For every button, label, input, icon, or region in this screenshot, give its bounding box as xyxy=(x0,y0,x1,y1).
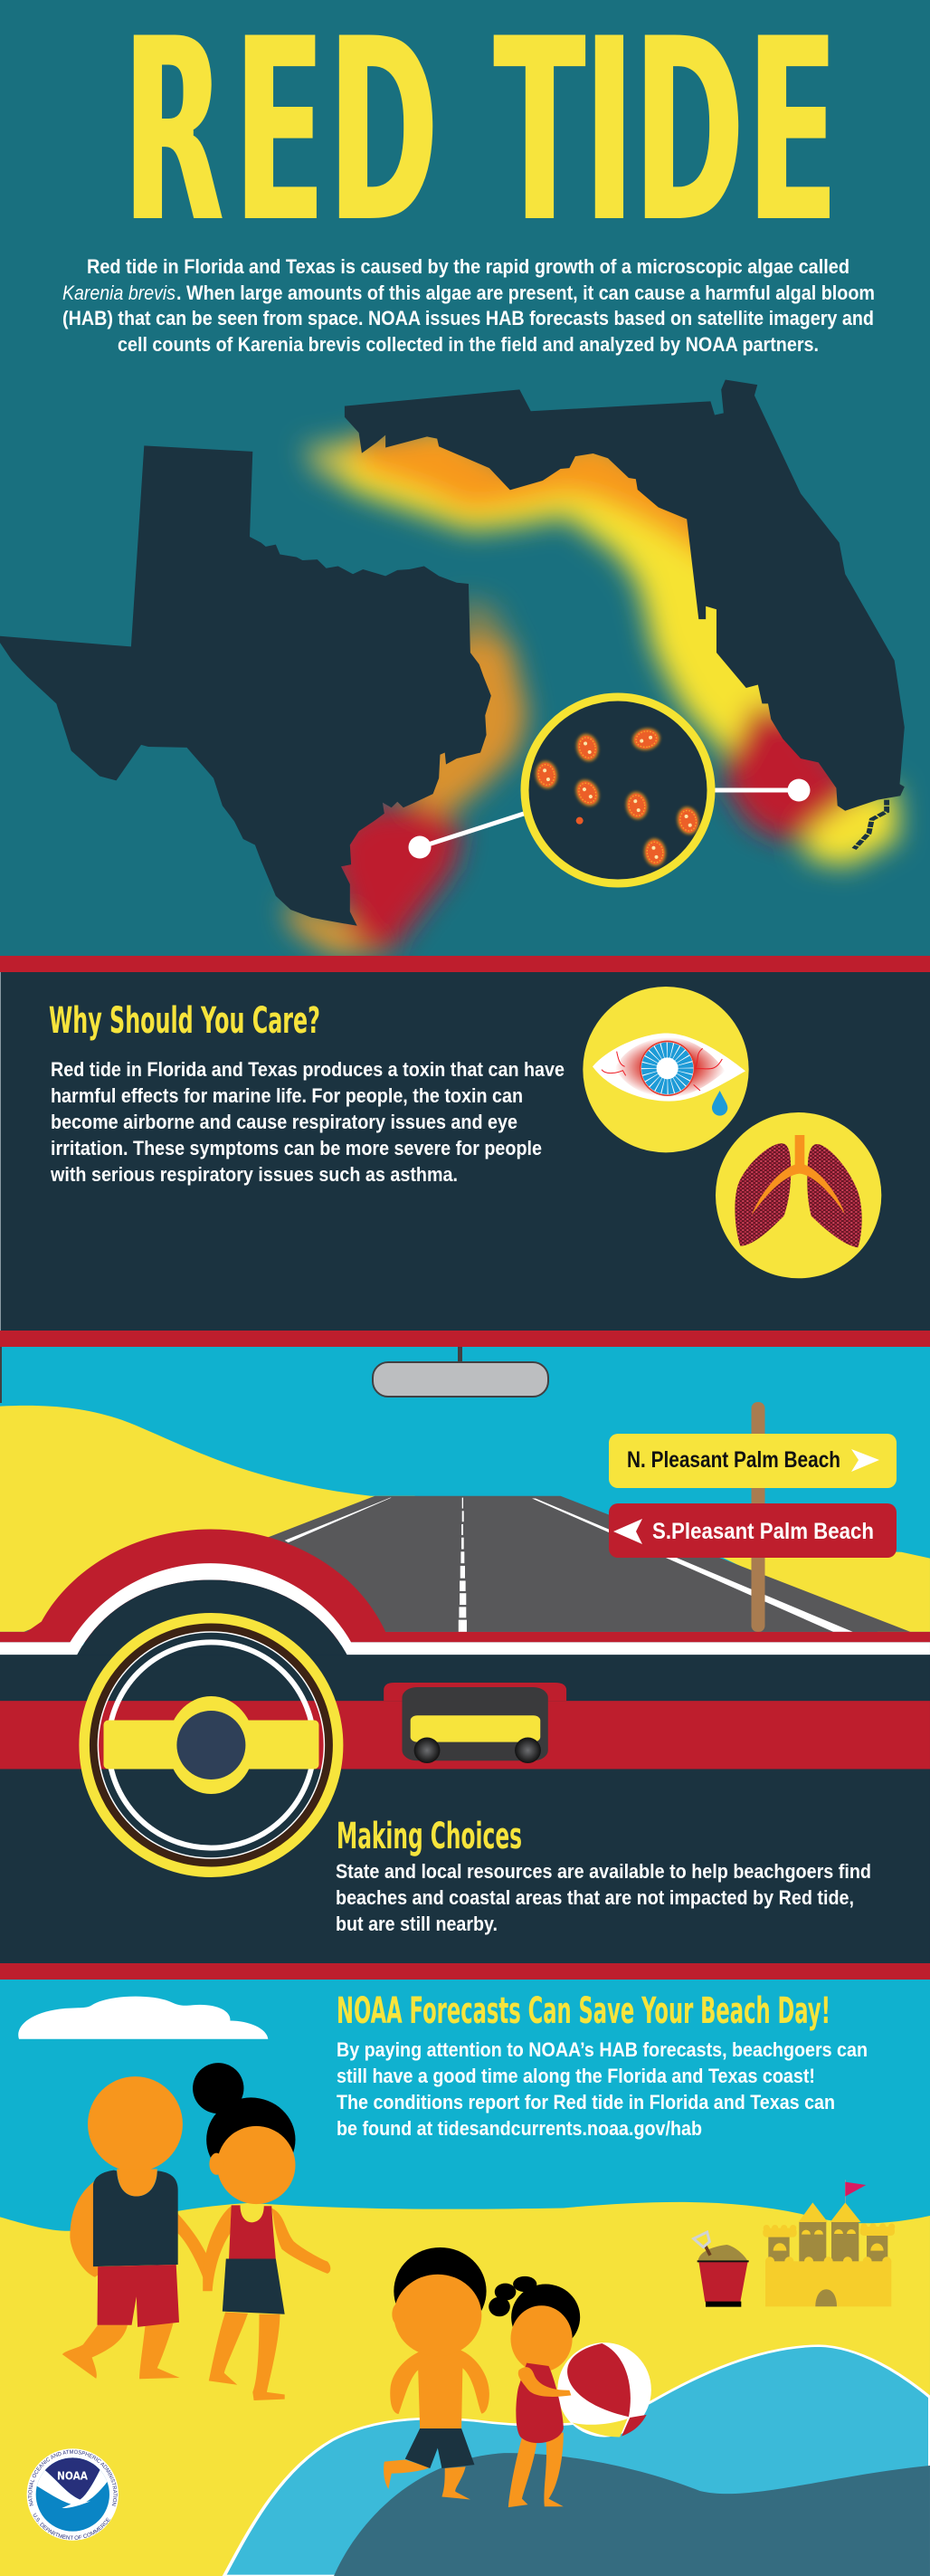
panel: why should you care xyxy=(0,956,930,1331)
panel: red tide header and map xyxy=(0,0,930,956)
algal bloom glow along the coast xyxy=(285,425,898,955)
road and sand landscape xyxy=(0,1406,930,1632)
heading: Making Choices xyxy=(337,1816,522,1857)
body text xyxy=(336,1860,871,1935)
beach ball xyxy=(557,2342,651,2437)
intro text: cell counts of Karenia brevis collected in the field and analyzed by NOAA partners. xyxy=(118,333,819,356)
body text: but are still nearby. xyxy=(336,1913,498,1935)
icon: irritated eye xyxy=(583,987,749,1152)
body text: become airborne and cause respiratory issues and eye xyxy=(51,1111,517,1133)
intro text xyxy=(62,255,875,356)
panel: making choices driving scene xyxy=(0,1331,930,1970)
NOAA logo: NATIONAL OCEANIC AND ATMOSPHERIC ADMINISTRATION xyxy=(28,2449,118,2506)
body text: with serious respiratory issues such as asthma. xyxy=(50,1163,458,1186)
NOAA logo: NOAA xyxy=(57,2469,89,2482)
steering wheel xyxy=(84,1618,337,1872)
body text xyxy=(337,2038,868,2140)
body text: Red tide in Florida and Texas produces a toxin that can have xyxy=(51,1058,565,1081)
car radio display xyxy=(402,1687,548,1763)
road signs xyxy=(609,1402,897,1632)
body text: The conditions report for Red tide in Florida and Texas can xyxy=(337,2091,835,2113)
body text: irritation. These symptoms can be more severe for people xyxy=(51,1137,542,1159)
boy figure xyxy=(384,2247,489,2499)
dashboard xyxy=(0,1529,930,1970)
road signs: N. Pleasant Palm Beach xyxy=(627,1447,840,1473)
map: Florida xyxy=(345,380,905,849)
body text: harmful effects for marine life. For people, the toxin can xyxy=(51,1084,523,1107)
rear-view mirror xyxy=(373,1347,548,1397)
intro text: Red tide in Florida and Texas is caused by the rapid growth of a microscopic algae called xyxy=(87,255,849,278)
body text: By paying attention to NOAA’s HAB forecasts, beachgoers can xyxy=(337,2038,868,2061)
connector lines and location dots xyxy=(409,778,811,858)
body text: State and local resources are available to help beachgoers find xyxy=(336,1860,871,1883)
woman figure xyxy=(193,2063,330,2400)
panel: NOAA forecasts beach scene xyxy=(0,1963,930,2576)
cloud xyxy=(18,1997,268,2039)
sandcastle xyxy=(763,2180,895,2306)
body text xyxy=(50,1058,565,1186)
body text: still have a good time along the Florida and Texas coast! xyxy=(337,2065,815,2087)
map: Texas xyxy=(0,445,491,926)
road signs: S.Pleasant Palm Beach xyxy=(652,1519,874,1544)
sand bucket and shovel xyxy=(694,2232,749,2307)
girl figure xyxy=(489,2276,580,2507)
intro text: Karenia brevis xyxy=(62,281,176,304)
magnified algae circle xyxy=(525,697,711,883)
sand xyxy=(0,2202,930,2576)
water xyxy=(224,2346,930,2576)
heading: Why Should You Care? xyxy=(49,1000,320,1042)
body text: beaches and coastal areas that are not impacted by Red tide, xyxy=(336,1886,854,1909)
man figure xyxy=(62,2076,214,2379)
NOAA logo: U.S. DEPARTMENT OF COMMERCE xyxy=(33,2513,110,2540)
icon: lungs xyxy=(716,1112,881,1278)
body text: be found at tidesandcurrents.noaa.gov/hab xyxy=(337,2117,702,2140)
NOAA logo xyxy=(27,2448,119,2541)
